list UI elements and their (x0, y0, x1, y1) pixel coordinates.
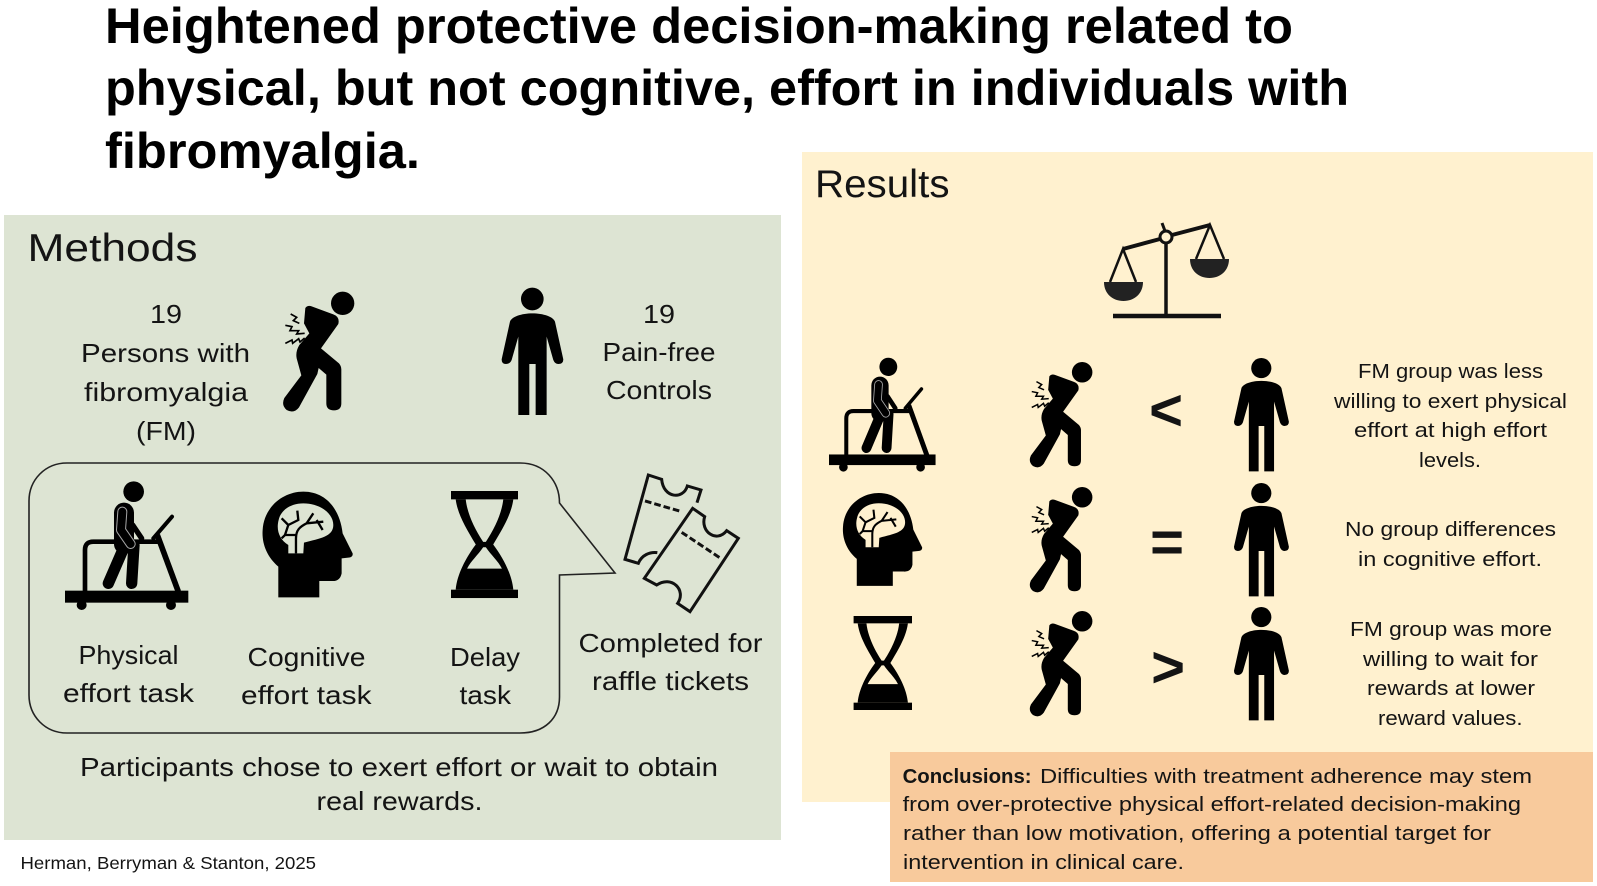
heading: methods: Methods (28, 227, 198, 270)
label: completed for raffle tickets (578, 628, 763, 696)
text: participants note: Participants chose to exert effort or wait to obtain (80, 752, 718, 782)
symbol: equals: = (1150, 510, 1184, 575)
text: pain-free controls count: 19 (643, 299, 675, 329)
text: physical finding: levels. (1419, 449, 1481, 472)
panel: results (802, 152, 1593, 802)
icon: control person (1234, 483, 1289, 596)
icon: treadmill (65, 481, 188, 610)
symbol: greater than: > (1151, 635, 1185, 700)
text: delay finding: willing to wait for (1362, 648, 1538, 671)
icon: person with back pain (283, 292, 354, 411)
text: cognitive finding: No group differences (1345, 518, 1556, 541)
text: cognitive finding: in cognitive effort. (1358, 548, 1542, 571)
symbol: less than: < (1149, 378, 1183, 443)
label: delay task (450, 642, 520, 710)
panel: conclusions: intervention in clinical care. (903, 851, 1184, 874)
label: cognitive effort task (241, 642, 373, 710)
row: cognitive effort (843, 483, 1556, 596)
text: physical finding: FM group was less (1358, 360, 1543, 383)
text: persons with fibromyalgia count: Persons with (81, 338, 250, 368)
text: persons with fibromyalgia count: (FM) (136, 416, 196, 446)
speech bubble: tasks (29, 463, 615, 733)
text: delay finding: FM group was more (1350, 618, 1552, 641)
text: cognitive finding (1345, 518, 1556, 571)
label: cognitive effort task: Cognitive (248, 642, 366, 672)
label: physical effort task: effort task (63, 678, 195, 708)
icon: brain in head (843, 493, 922, 586)
icon: brain in head (263, 492, 353, 597)
title (105, 0, 1349, 179)
label: delay task: task (460, 680, 512, 710)
text: delay finding: rewards at lower (1367, 677, 1535, 700)
row: physical effort (829, 358, 1567, 472)
icon: hourglass (451, 491, 518, 598)
panel: conclusions: Difficulties with treatment adherence may stem (1040, 765, 1532, 788)
text: participants note: real rewards. (316, 786, 482, 816)
title: physical, but not cognitive, effort in individuals with (105, 60, 1349, 116)
heading: results: Results (815, 163, 950, 206)
icon: treadmill (829, 358, 936, 472)
text: delay finding: reward values. (1378, 707, 1522, 730)
text: persons with fibromyalgia count (81, 299, 250, 446)
icon: control person (1234, 607, 1289, 720)
icon: person with back pain (1030, 611, 1092, 716)
label: physical effort task (63, 640, 195, 708)
icon: hourglass (854, 616, 912, 710)
text: physical finding: willing to exert physical (1333, 390, 1567, 413)
icon: control person (502, 288, 563, 415)
icon: control person (1234, 358, 1289, 471)
panel: conclusions: from over-protective physical effort-related decision-making (903, 793, 1521, 816)
icon: raffle tickets (625, 475, 738, 612)
text: delay finding (1350, 618, 1552, 730)
icon: person with back pain (1030, 487, 1092, 592)
label: cognitive effort task: effort task (241, 680, 373, 710)
row: delay (854, 607, 1552, 730)
label: completed for raffle tickets: Completed for (578, 628, 763, 658)
text: physical finding (1333, 360, 1567, 472)
label: delay task: Delay (450, 642, 520, 672)
text: persons with fibromyalgia count: fibromyalgia (84, 377, 249, 407)
text: pain-free controls count (602, 299, 716, 405)
panel: conclusions (890, 752, 1593, 882)
label: completed for raffle tickets: raffle tickets (592, 666, 749, 696)
icon: balance scale (1104, 223, 1229, 316)
icon: person with back pain (1030, 362, 1092, 467)
panel: conclusions: rather than low motivation, offering a potential target for (903, 822, 1491, 845)
text: pain-free controls count: Controls (606, 375, 712, 405)
text: persons with fibromyalgia count: 19 (150, 299, 182, 329)
panel: conclusions: Conclusions: (903, 765, 1032, 788)
citation: Herman, Berryman & Stanton, 2025 (20, 853, 316, 873)
panel: methods (4, 215, 781, 840)
label: physical effort task: Physical (78, 640, 178, 670)
title: fibromyalgia. (105, 123, 420, 179)
text: physical finding: effort at high effort (1354, 419, 1547, 442)
text: pain-free controls count: Pain-free (602, 337, 716, 367)
text: participants note (80, 752, 718, 816)
